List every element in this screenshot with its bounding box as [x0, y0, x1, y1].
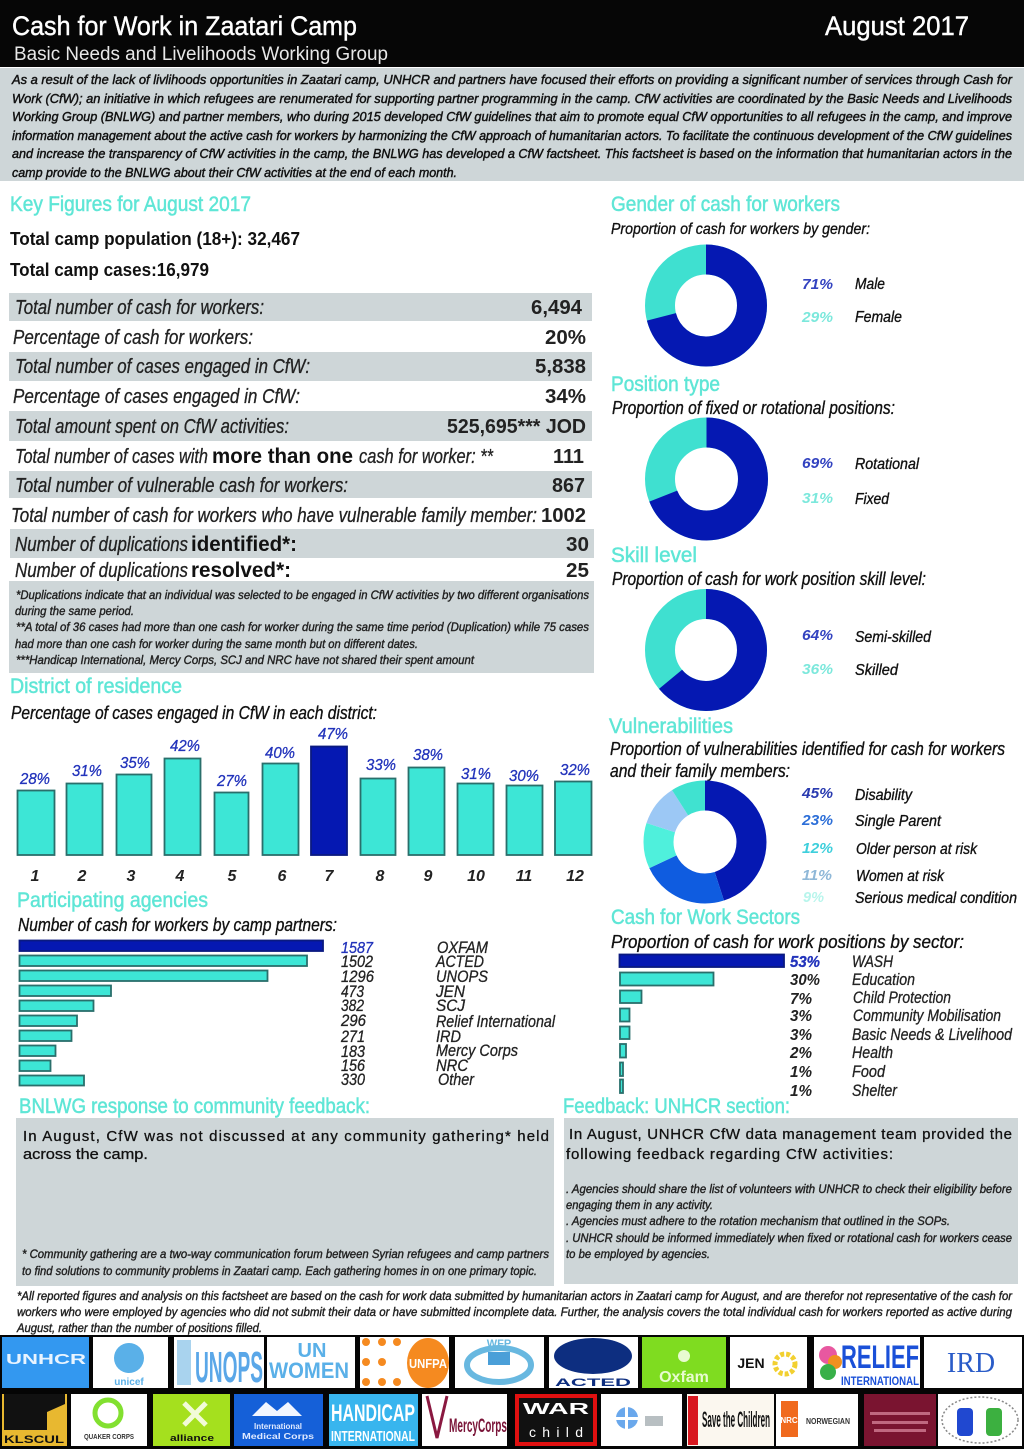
heading: skill: Skill level	[611, 544, 697, 567]
logo: NRC	[776, 1394, 858, 1446]
key figures table: 6,494	[531, 297, 583, 319]
footnotes panel: **A total of 36 cases had more than one cash for worker during the same time period (Duplication) while 75 cases	[16, 620, 589, 634]
panel: introduction: and increase the transparency of CfW activities in the camp, the BNLWG has developed a CfW factsheet. This factsheet is based on the information that humanitarian actors in the	[12, 146, 1012, 161]
logo: JEN: JEN	[737, 1355, 765, 1371]
legend: skill	[802, 627, 932, 679]
bar chart: districts: 12	[566, 868, 584, 885]
panel: introduction: camp provide to the BNLWG about their CfW activities at the end of each month.	[12, 165, 457, 180]
title: Cash for Work in Zaatari Camp	[12, 11, 357, 41]
logo: maroon organisation	[864, 1394, 936, 1446]
bar chart: districts: 30%	[509, 768, 539, 785]
logo: UNHCR	[2, 1337, 89, 1388]
legend: vulnerabilities: Women at risk	[856, 868, 945, 885]
bar chart: districts: 47%	[318, 726, 348, 743]
bar chart: sectors: WASH	[852, 952, 894, 971]
logo: WFP	[455, 1337, 544, 1388]
bar chart: agencies: 1502	[341, 952, 373, 971]
bar chart: agencies: 1587	[341, 940, 374, 957]
list: UNHCR feedback points: . Agencies should share the list of volunteers with UNHCR to check their eligibility before	[566, 1182, 1012, 1196]
bar chart: districts: 2	[77, 868, 87, 885]
bar chart: agencies: UNOPS	[436, 967, 489, 986]
bar chart: sectors: Child Protection	[853, 988, 951, 1007]
logo: Relief International	[814, 1337, 920, 1388]
panel: introduction: information management about the active cash for workers by harmonizing the CfW approach of humanitarian actors. To facilitate the continuous development of the CfW guidelines	[12, 128, 1012, 143]
text: UNHCR feedback: In August, UNHCR CfW data management team provided the	[569, 1126, 1012, 1143]
bar chart: districts: 27%	[216, 773, 247, 790]
logo strip: UNOPS	[195, 1343, 263, 1392]
logo: UNOPS	[174, 1337, 264, 1392]
bar chart: sectors: 30%	[790, 972, 820, 989]
logo: KLSCUL	[2, 1394, 67, 1446]
panel: gender	[611, 193, 902, 352]
footnote: community gathering: to find solutions to community problems in Zaatari camp. Each gathering homes in on one primary topic.	[22, 1264, 537, 1278]
bar chart: districts: 6	[278, 868, 287, 885]
key figures table: Total number of cash for workers who have vulnerable family member:	[11, 505, 537, 527]
bar chart: agencies: 271	[340, 1027, 365, 1046]
logo: ACTED	[549, 1337, 638, 1389]
legend: position: 31%	[802, 490, 833, 507]
bar chart: districts: 5	[228, 868, 238, 885]
heading: gender: Gender of cash for workers	[611, 193, 840, 216]
key figures table: Total number of cases engaged in CfW:	[15, 356, 310, 378]
logo: KLSCUL: KLSCUL	[4, 1434, 64, 1446]
bar chart: agencies: 382	[341, 996, 364, 1015]
logo: Green alliance: alliance	[170, 1433, 214, 1443]
bar chart: sectors: 53%	[790, 954, 820, 971]
logo: UN Women	[267, 1337, 355, 1388]
logo: Relief International: RELIEF	[841, 1339, 919, 1375]
box: UNHCR feedback	[564, 1118, 1018, 1284]
footnotes panel: during the same period.	[15, 604, 134, 618]
legend: skill: 36%	[802, 661, 833, 678]
legend: gender: 71%	[802, 276, 833, 293]
logo: unicef: unicef	[114, 1377, 144, 1388]
bar chart: agencies: 473	[341, 982, 364, 1001]
bar chart: districts: 31%	[72, 763, 102, 780]
legend: vulnerabilities: 23%	[801, 812, 833, 829]
text: BNLWG response: In August, CfW was not discussed at any community gathering* held	[23, 1128, 549, 1145]
bar chart: districts: 38%	[413, 747, 443, 764]
bar chart: sectors: Health	[852, 1043, 893, 1062]
footnotes panel: ***Handicap International, Mercy Corps, SCJ and NRC have not shared their spent amount	[16, 653, 475, 667]
donut: skill	[660, 604, 752, 696]
footnotes panel	[9, 581, 594, 673]
legend: gender: 29%	[801, 309, 833, 326]
bar chart: districts: 7	[325, 868, 335, 885]
logo: International Medical Corps: Medical Corps	[242, 1432, 315, 1441]
key figures table: Total number of cash for workers:	[15, 297, 264, 319]
donut: position	[660, 432, 753, 526]
bar chart: sectors: 3%	[790, 1008, 812, 1025]
key figures table: 20%	[545, 327, 586, 349]
bar chart: agencies: OXFAM	[437, 938, 489, 957]
logo strip	[0, 1335, 1024, 1449]
key figures table: Percentage of cash for workers:	[13, 327, 253, 349]
legend: gender	[801, 276, 902, 326]
bar chart: sectors: Education	[852, 970, 915, 989]
heading: agencies: Participating agencies	[17, 889, 208, 912]
panel: BNLWG response	[16, 1095, 554, 1286]
key figures table: 525,695*** JOD	[447, 416, 586, 438]
legend: vulnerabilities: 9%	[803, 889, 824, 906]
key figures table: Number of duplications	[15, 534, 188, 556]
key figures table: resolved*:	[191, 559, 291, 582]
logo: Mercy Corps	[422, 1394, 507, 1446]
key figures table: Total number of vulnerable cash for workers:	[15, 475, 348, 497]
subheading: district: Percentage of cases engaged in CfW in each district:	[11, 703, 377, 723]
bar chart: districts: 8	[376, 868, 385, 885]
footnote: community gathering	[22, 1247, 549, 1278]
legend: position: 69%	[802, 455, 833, 472]
bar chart: agencies: 156	[341, 1056, 365, 1075]
heading: BNLWG response: BNLWG response to community feedback:	[19, 1095, 370, 1118]
bar chart: agencies: 183	[341, 1042, 365, 1061]
logo: International Medical Corps	[234, 1394, 323, 1446]
total camp cases: Total camp cases:16,979	[10, 260, 209, 280]
logo: NRC: NRC	[780, 1416, 798, 1425]
legend: skill: Skilled	[855, 662, 899, 679]
bar chart: sectors: Food	[852, 1062, 885, 1081]
logo: Mercy Corps: MercyCorps	[449, 1416, 507, 1437]
logo: International Medical Corps: International	[254, 1422, 302, 1431]
text: BNLWG response: across the camp.	[23, 1146, 148, 1163]
key figures table: 867	[552, 475, 585, 497]
bar chart: districts: 42%	[170, 738, 200, 755]
disclaimer note: August, rather than the number of positions filled.	[16, 1321, 262, 1335]
key figures table: Percentage of cases engaged in CfW:	[13, 386, 300, 408]
legend: vulnerabilities: 12%	[802, 840, 833, 857]
list: UNHCR feedback points	[566, 1182, 1012, 1261]
panel: participating agencies	[17, 889, 556, 1089]
footnote: community gathering: * Community gathering are a two-way communication forum between Syrian refugees and camp partners	[22, 1247, 549, 1261]
logo: Q: QUAKER CORPS	[84, 1434, 134, 1441]
logo: UNFPA: UNFPA	[409, 1356, 448, 1371]
bar chart: sectors: 7%	[790, 991, 812, 1008]
bar chart: sectors: 1%	[790, 1083, 812, 1100]
key figures table: more than one	[212, 445, 353, 468]
bar chart: agencies: 296	[340, 1011, 366, 1030]
bar chart: districts: 35%	[120, 755, 150, 772]
bar chart: districts: 4	[175, 868, 185, 885]
bar chart: districts: 31%	[461, 766, 491, 783]
bar chart: agencies: 1296	[341, 967, 374, 986]
date: August 2017	[825, 11, 969, 41]
bar chart: districts: 9	[424, 868, 433, 885]
logo: Handicap International: INTERNATIONAL	[331, 1428, 415, 1445]
text: UNHCR feedback: following feedback regarding CfW activities:	[566, 1146, 893, 1163]
panel: position type	[611, 373, 919, 526]
logo: WFP: WFP	[487, 1338, 511, 1350]
footnotes panel: *Duplications indicate that an individual was selected to be engaged in CfW activities by two different organisations	[16, 588, 589, 602]
text: BNLWG response	[23, 1128, 549, 1163]
heading: district: District of residence	[10, 675, 182, 698]
panel: UNHCR feedback	[563, 1095, 1018, 1284]
bar chart: sectors: 3%	[790, 1027, 812, 1044]
legend: vulnerabilities: 45%	[801, 785, 833, 802]
bar chart: sectors: Shelter	[852, 1081, 898, 1100]
logo: War Child: WAR	[523, 1401, 590, 1418]
bar chart: sectors	[620, 952, 1012, 1100]
legend: vulnerabilities: 11%	[802, 867, 832, 884]
logo: round seal	[938, 1394, 1022, 1446]
logo: Oxfam: Oxfam	[659, 1369, 709, 1386]
legend: skill: Semi-skilled	[855, 629, 932, 646]
bar chart: districts: 40%	[265, 745, 295, 762]
list: UNHCR feedback points: . Agencies must adhere to the rotation mechanism that outlined in the SOPs.	[566, 1214, 950, 1228]
bar chart: districts: 1	[31, 868, 40, 885]
bar chart: sectors: 1%	[790, 1064, 812, 1081]
logo: Handicap International	[329, 1394, 418, 1446]
legend: position: Fixed	[855, 491, 890, 508]
legend: position	[802, 455, 919, 508]
legend: vulnerabilities	[801, 785, 1017, 907]
legend: skill: 64%	[802, 627, 833, 644]
key figures table: 25	[566, 560, 589, 582]
heading: position: Position type	[611, 373, 720, 396]
key figures table: Number of duplications	[15, 560, 188, 582]
bar chart: districts: 28%	[19, 771, 50, 788]
logo: UNFPA	[360, 1337, 449, 1388]
panel: district of residence	[10, 675, 592, 885]
key figures table: Total amount spent on CfW activities:	[15, 416, 289, 438]
logo: blue cross	[601, 1394, 682, 1446]
panel: skill level	[611, 544, 932, 696]
subtitle: Basic Needs and Livelihoods Working Group	[14, 44, 388, 65]
bar chart: agencies: Relief International	[436, 1012, 556, 1031]
logo: War Child	[515, 1394, 597, 1446]
legend: position: Rotational	[855, 456, 919, 473]
heading: sectors: Cash for Work Sectors	[611, 906, 800, 929]
bar chart: districts: 3	[127, 868, 136, 885]
bar chart: districts: 33%	[366, 757, 396, 774]
donut: vulnerabilities	[658, 796, 752, 888]
bar chart: agencies: Mercy Corps	[436, 1041, 518, 1060]
list: UNHCR feedback points: engaging them in any activity.	[566, 1198, 713, 1212]
key figures table: identified*:	[191, 533, 297, 556]
panel: vulnerabilities	[609, 715, 1017, 907]
panel: introduction: Work (CfW); an initiative in which refugees are renumerated for supporting partner programming in the camp. CfW activities are coordinated by the Basic Needs and Livelihoods	[12, 91, 1012, 106]
heading: key figures: Key Figures for August 2017	[10, 193, 251, 216]
logo: UNHCR: UNHCR	[6, 1351, 86, 1368]
subheading: vulnerabilities	[610, 739, 1005, 781]
subheading: agencies: Number of cash for workers by camp partners:	[18, 915, 337, 935]
legend: gender: Male	[855, 276, 885, 293]
legend: vulnerabilities: Single Parent	[855, 813, 941, 830]
total camp population: Total camp population (18+): 32,467	[10, 229, 300, 249]
bar chart: sectors: 2%	[789, 1045, 812, 1062]
bar chart: agencies: Other	[438, 1070, 475, 1089]
logo: War Child: child	[529, 1424, 583, 1440]
subheading: vulnerabilities: and their family members:	[610, 761, 790, 781]
key figures table: 5,838	[535, 356, 586, 378]
key figures table: 111	[553, 446, 584, 468]
logo: Oxfam	[642, 1337, 726, 1388]
heading: vulnerabilities: Vulnerabilities	[609, 715, 733, 738]
box: BNLWG response	[16, 1118, 554, 1286]
logo: unicef	[93, 1337, 168, 1388]
footnotes panel: had more than one cash for worker during the same month but on different dates.	[15, 637, 418, 651]
bar chart: agencies: SCJ	[436, 996, 465, 1015]
header banner	[0, 0, 1024, 67]
logo: NRC: NORWEGIAN	[806, 1417, 850, 1426]
panel: key figures	[9, 193, 594, 673]
logo: ACTED: ACTED	[555, 1377, 631, 1389]
legend: vulnerabilities: Older person at risk	[856, 841, 978, 858]
panel: introduction	[0, 68, 1024, 181]
logo: UN Women: UN	[298, 1340, 326, 1362]
panel: sectors	[611, 906, 1012, 1100]
logo: Handicap International: HANDICAP	[331, 1400, 415, 1427]
subheading: skill: Proportion of cash for work position skill level:	[612, 569, 926, 589]
panel: introduction: Working Group (BNLWG) and partner members, who during 2015 developed CfW guidelines that aim to promote equal CfW opportunities to all refugees in the camp, and improve	[12, 109, 1012, 124]
bar chart: districts: 11	[516, 868, 532, 885]
donut: gender	[660, 260, 752, 352]
logo: Green alliance	[153, 1394, 230, 1446]
bar chart: districts	[18, 726, 592, 885]
legend: vulnerabilities: Disability	[855, 787, 913, 804]
key figures table: 30	[566, 534, 589, 556]
bar chart: agencies: JEN	[435, 982, 466, 1001]
key figures table: 34%	[545, 386, 586, 408]
disclaimer note	[16, 1289, 1013, 1335]
subheading: gender: Proportion of cash for workers by gender:	[611, 221, 870, 238]
key figures table: Total number of cases with	[15, 446, 208, 468]
logo: Save the Children	[687, 1394, 774, 1446]
key figures table	[9, 293, 594, 582]
heading: UNHCR feedback: Feedback: UNHCR section:	[563, 1095, 790, 1118]
panel: introduction: As a result of the lack of livlihoods opportunities in Zaatari camp, UNHCR and partners have focused their efforts on providing a significant number of services through Cash for	[11, 72, 1013, 87]
bar chart: agencies: IRD	[436, 1027, 461, 1046]
logo: Q	[71, 1394, 147, 1446]
key figures table: 1002	[541, 505, 586, 527]
logo: JEN	[730, 1337, 807, 1388]
subheading: position: Proportion of fixed or rotational positions:	[612, 398, 895, 418]
bar chart: agencies: ACTED	[435, 952, 484, 971]
text: UNHCR feedback	[566, 1126, 1012, 1163]
logo: IRD: IRD	[947, 1348, 995, 1379]
bar chart: districts: 10	[467, 868, 485, 885]
bar chart: agencies	[20, 938, 556, 1089]
logo: Relief International: INTERNATIONAL	[841, 1374, 919, 1388]
legend: gender: Female	[855, 309, 902, 326]
logo: IRD	[924, 1337, 1022, 1388]
key figures table: cash for worker: **	[359, 446, 494, 468]
subheading: sectors: Proportion of cash for work positions by sector:	[611, 932, 964, 952]
bar chart: districts: 32%	[560, 762, 590, 779]
logo: UN Women: WOMEN	[269, 1358, 349, 1383]
bar chart: agencies: NRC	[436, 1056, 469, 1075]
list: UNHCR feedback points: to be employed by agencies.	[566, 1247, 710, 1261]
logo strip: Save the Children	[702, 1407, 770, 1432]
bar chart: agencies: 330	[341, 1070, 365, 1089]
